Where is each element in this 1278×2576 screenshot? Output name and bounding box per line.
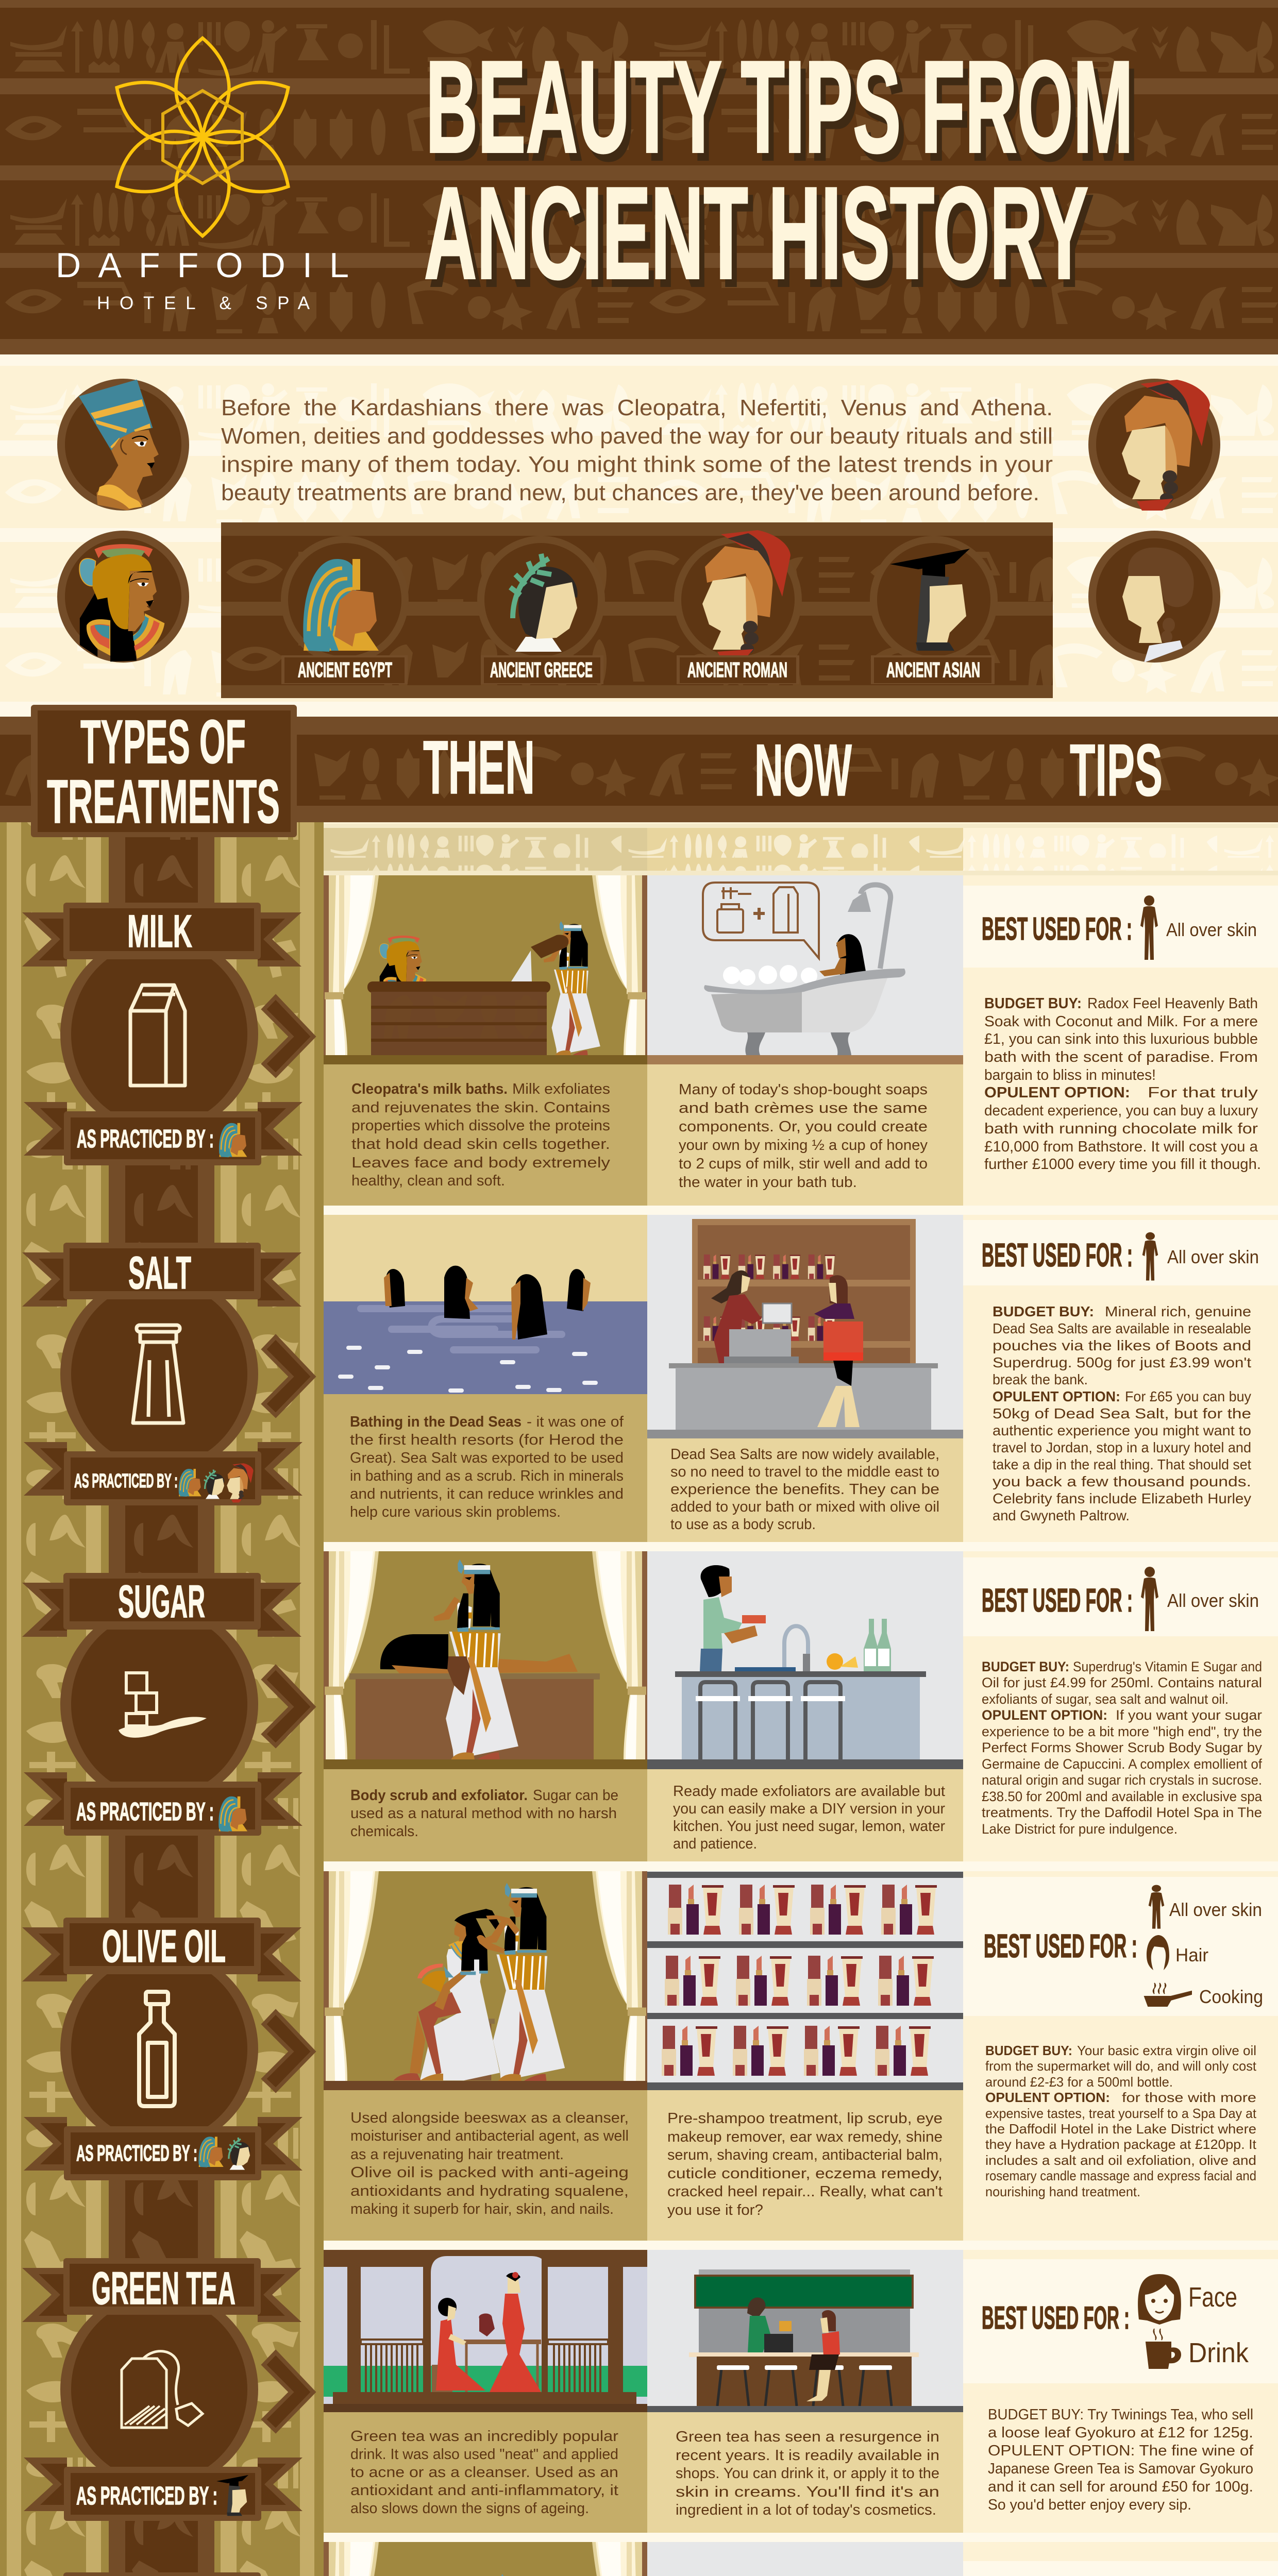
- best used for: BEST USED FOR :: [982, 1582, 1133, 1619]
- text: tea now: Green tea has seen a resurgence in: [676, 2429, 939, 2445]
- text: tea now: recent years. It is readily available in: [676, 2447, 939, 2464]
- tips text: Celebrity fans include Elizabeth Hurley: [993, 1490, 1251, 1506]
- best used for: BEST USED FOR :: [982, 2300, 1130, 2336]
- tips text: [985, 2043, 1257, 2199]
- text: milk now: Many of today's shop-bought soaps: [679, 1081, 928, 1098]
- text: sugar then: used as a natural method with no harsh: [350, 1805, 617, 1822]
- treatment: green tea: [22, 2258, 313, 2521]
- text: tea then: also slows down the signs of ageing.: [350, 2500, 589, 2517]
- tips text: the Daffodil Hotel in the Lake District where: [985, 2121, 1256, 2137]
- tips text: experience to be a bit more "high end", try the: [982, 1724, 1262, 1739]
- heading: now: NOW: [754, 730, 852, 811]
- text: sugar then: chemicals.: [350, 1823, 418, 1840]
- best used for: Cooking: [1199, 1986, 1263, 2007]
- scene: cleopatra milk bath: [324, 875, 647, 1064]
- row: sugar then: [324, 1551, 647, 1840]
- icon: sugar spoon: [119, 1673, 207, 1738]
- tips text: Oil for just £4.99 for 250ml. Contains natural: [982, 1675, 1262, 1690]
- header panel: [0, 0, 1278, 354]
- tips text: For £65 you can buy: [1125, 1388, 1251, 1404]
- text: milk then: Leaves face and body extremely: [351, 1155, 611, 1171]
- text: olive now: cracked heel repair... Really, what can't: [667, 2183, 943, 2200]
- tips text: Japanese Green Tea is Samovar Gyokuro: [988, 2461, 1253, 2477]
- tips text: BUDGET BUY:: [982, 1659, 1069, 1674]
- text: tea now: skin in creams. You'll find it's an: [676, 2484, 939, 2500]
- row: milk then: [324, 875, 647, 1189]
- text: milk then: [351, 1081, 611, 1189]
- tips text: OPULENT OPTION: The fine wine of: [988, 2443, 1254, 2459]
- heading: then: THEN: [423, 725, 535, 810]
- best used for: [963, 1220, 1278, 1285]
- speech bubble: [703, 883, 819, 958]
- text: tea then: [350, 2428, 618, 2517]
- column panels backgrounds: [324, 824, 1278, 2576]
- scene: salt shop: [647, 1215, 963, 1438]
- scene: applying kohl: [324, 2542, 647, 2576]
- text: olive then: [350, 2110, 629, 2217]
- row: salt tips: [963, 1220, 1278, 1523]
- icon: milk carton: [130, 985, 185, 1086]
- text: olive then: Used alongside beeswax as a cleanser,: [350, 2110, 629, 2126]
- treatment: salt: [22, 1243, 313, 1505]
- tips text: Germaine de Capuccini. A complex emollient of: [982, 1756, 1262, 1772]
- text: milk then: Milk exfoliates: [512, 1081, 610, 1097]
- scene: kitchen: [647, 1551, 963, 1769]
- text: milk then: properties which dissolve the proteins: [351, 1117, 610, 1134]
- row: kohl tips: [963, 2561, 1278, 2576]
- text: milk now: to 2 cups of milk, stir well and add to: [679, 1156, 928, 1172]
- tips text: For that truly: [1148, 1084, 1258, 1101]
- tips text: BUDGET BUY:: [985, 2043, 1072, 2058]
- row: sugar tips: [963, 1557, 1278, 1837]
- treatment: kohl: [22, 2572, 313, 2576]
- text: sugar then: Body scrub and exfoliator.: [350, 1787, 528, 1804]
- tips text: rosemary candle massage and express facial and: [985, 2168, 1256, 2183]
- treatment: green tea: AS PRACTICED BY :: [76, 2482, 217, 2510]
- scene: product shelves: [647, 1871, 963, 2090]
- intro text: Women, deities and goddesses who paved the way for our beauty rituals and still: [221, 423, 1053, 449]
- treatment: olive oil: AS PRACTICED BY :: [76, 2141, 197, 2166]
- tips text: Radox Feel Heavenly Bath: [1087, 995, 1258, 1012]
- culture: ancient Greece: [477, 536, 605, 684]
- row: olive tips: [963, 1877, 1278, 2199]
- row: tea then: [324, 2250, 647, 2517]
- logo: Daffodil Hotel and Spa: HOTEL & SPA: [97, 293, 310, 313]
- treatment: olive oil: [22, 1918, 313, 2180]
- row: sugar now: [647, 1551, 963, 1852]
- scene: bath tub: [647, 875, 963, 1064]
- treatment: green tea: GREEN TEA: [92, 2262, 236, 2314]
- tips text: further £1000 every time you fill it though.: [984, 1156, 1261, 1173]
- text: sugar now: and patience.: [673, 1836, 757, 1852]
- tips text: take a dip in the real thing. That should set: [993, 1456, 1251, 1472]
- best used for: Hair: [1175, 1944, 1208, 1965]
- tips text: Mineral rich, genuine: [1105, 1303, 1251, 1319]
- scene: tea bar: [647, 2250, 963, 2406]
- tips text: break the bank.: [993, 1371, 1088, 1387]
- text: olive then: antioxidants and hydrating squalene,: [350, 2183, 629, 2199]
- culture: ancient Greece: ANCIENT GREECE: [490, 658, 593, 682]
- tips text: authentic experience you might want to: [993, 1422, 1251, 1438]
- tips text: BUDGET BUY:: [993, 1303, 1094, 1319]
- text: olive now: [667, 2110, 943, 2218]
- text: sugar then: [350, 1787, 618, 1840]
- intro text: beauty treatments are brand new, but chances are, they've been around before.: [221, 480, 1039, 505]
- text: salt now: experience the benefits. They can be: [670, 1481, 939, 1498]
- row: milk tips: [963, 886, 1278, 1173]
- tips text: bargain to bliss in minutes!: [984, 1067, 1156, 1083]
- heading: types of treatments: TYPES OF: [80, 707, 246, 776]
- best used for: All over skin: [1169, 1899, 1262, 1920]
- culture: ancient Rome: [674, 530, 802, 684]
- text: sugar now: you can easily make a DIY version in your: [673, 1801, 945, 1817]
- best used for: [963, 2561, 1278, 2576]
- tips text: pouches via the likes of Boots and: [993, 1337, 1251, 1353]
- best used for: [963, 2259, 1278, 2383]
- text: salt now: to use as a body scrub.: [670, 1516, 816, 1533]
- text: olive now: you use it for?: [667, 2202, 763, 2218]
- row: salt now: [647, 1215, 963, 1533]
- tips text: [993, 1303, 1251, 1523]
- treatment: olive oil: OLIVE OIL: [102, 1920, 226, 1972]
- treatment: milk: MILK: [127, 905, 192, 957]
- best used for: Face: [1188, 2282, 1237, 2313]
- row: kohl now: [647, 2542, 963, 2576]
- row: tea tips: [963, 2259, 1278, 2513]
- text: olive then: Olive oil is packed with anti-ageing: [350, 2164, 629, 2181]
- best used for: [963, 886, 1278, 968]
- tips text: natural origin and sugar rich crystals in sucrose.: [982, 1772, 1262, 1788]
- intro panel: [0, 354, 1278, 717]
- tips text: OPULENT OPTION:: [985, 2090, 1110, 2105]
- column heading band: [0, 705, 1278, 837]
- row: milk now: [647, 875, 963, 1191]
- scene: tea pavilion: [324, 2250, 647, 2404]
- text: salt then: and nutrients, it can reduce wrinkles and: [350, 1486, 624, 1502]
- icon: tea cup: [1146, 2329, 1181, 2368]
- scene: body scrub: [324, 1551, 647, 1769]
- text: salt then: help cure various skin problems.: [350, 1504, 561, 1520]
- tips text: So you'd better enjoy every sip.: [988, 2497, 1191, 2513]
- portrait: Nefertiti: [57, 379, 189, 511]
- best used for: All over skin: [1166, 919, 1257, 940]
- intro text: [221, 395, 1053, 505]
- text: salt then: Great). Sea Salt was exported to be used: [350, 1450, 624, 1466]
- treatment: sugar: AS PRACTICED BY :: [76, 1798, 214, 1826]
- culture: ancient Egypt: ANCIENT EGYPT: [298, 658, 392, 682]
- text: sugar now: kitchen. You just need sugar, lemon, water: [673, 1818, 945, 1835]
- best used for: BEST USED FOR :: [984, 1927, 1137, 1964]
- portrait: Venus: [1088, 531, 1220, 663]
- culture: ancient Egypt: [281, 536, 409, 684]
- heading: tips: TIPS: [1070, 730, 1163, 811]
- icon: cooking pan: [1145, 1983, 1191, 2006]
- panel: ancient cultures: [221, 522, 1053, 698]
- text: tea now: [676, 2429, 939, 2518]
- tips text: expensive tastes, treat yourself to a Spa Day at: [985, 2106, 1257, 2121]
- tips text: [988, 2406, 1254, 2513]
- text: sugar now: [673, 1783, 945, 1852]
- text: olive then: making it superb for hair, skin, and nails.: [350, 2201, 614, 2217]
- tips text: £38.50 for 200ml and available in exclusive spa: [982, 1789, 1263, 1804]
- text: milk now: [679, 1081, 928, 1191]
- row: kohl then: [324, 2542, 647, 2576]
- treatment: salt: AS PRACTICED BY :: [74, 1470, 178, 1492]
- tips text: OPULENT OPTION:: [982, 1707, 1107, 1723]
- text: salt now: Dead Sea Salts are now widely available,: [670, 1446, 939, 1463]
- text: milk now: and bath crèmes use the same: [679, 1100, 928, 1116]
- tips text: and Gwyneth Paltrow.: [993, 1507, 1130, 1523]
- text: salt now: [670, 1446, 939, 1533]
- text: salt now: so no need to travel to the middle east to: [670, 1464, 939, 1480]
- tips text: Superdrug's Vitamin E Sugar and: [1073, 1659, 1262, 1674]
- tips text: OPULENT OPTION:: [984, 1084, 1130, 1101]
- tips text: If you want your sugar: [1116, 1707, 1262, 1723]
- row: olive now: [647, 1871, 963, 2218]
- tips text: bath with running chocolate milk for: [984, 1121, 1258, 1137]
- portrait: Cleopatra: [57, 531, 189, 663]
- tips text: BUDGET BUY:: [984, 995, 1082, 1012]
- text: milk now: your own by mixing ½ a cup of honey: [679, 1137, 928, 1154]
- text: tea then: drink. It was also used "neat" and applied: [350, 2446, 618, 2463]
- logo: Daffodil Hotel and Spa: DAFFODIL: [56, 246, 349, 285]
- text: salt then: in bathing and as a scrub. Rich in minerals: [350, 1468, 624, 1484]
- intro text: inspire many of them today. You might think some of the latest trends in your: [221, 452, 1053, 477]
- scene: hair treatment: [324, 1871, 647, 2090]
- text: salt then: [350, 1414, 624, 1520]
- tips text: includes a salt and oil exfoliation, olive and: [985, 2153, 1256, 2168]
- left column background: [0, 822, 324, 2576]
- best used for: [963, 1557, 1278, 1636]
- tips text: Perfect Forms Shower Scrub Body Sugar by: [982, 1740, 1262, 1755]
- text: milk then: healthy, clean and soft.: [351, 1173, 505, 1189]
- tips text: [984, 995, 1261, 1173]
- title: [424, 33, 1138, 314]
- culture: ancient Asia: [870, 536, 998, 684]
- logo: Daffodil Hotel and Spa: [56, 38, 349, 313]
- text: tea now: shops. You can drink it, or apply it to the: [676, 2465, 939, 2482]
- intro text: Before the Kardashians there was Cleopatra, Nefertiti, Venus and Athena.: [221, 395, 1053, 420]
- tips text: Lake District for pure indulgence.: [982, 1821, 1178, 1837]
- text: tea now: ingredient in a lot of today's cosmetics.: [676, 2502, 936, 2518]
- tips text: BUDGET BUY: Try Twinings Tea, who sell: [988, 2406, 1253, 2423]
- tips text: from the supermarket will do, and will only cost: [985, 2058, 1257, 2074]
- tips text: around £2-£3 for a 500ml bottle.: [985, 2074, 1173, 2090]
- portrait: Athena: [1088, 379, 1220, 511]
- text: tea then: Green tea was an incredibly popular: [350, 2428, 618, 2445]
- text: olive now: cuticle conditioner, eczema remedy,: [667, 2165, 943, 2182]
- tips text: for those with more: [1122, 2090, 1256, 2105]
- icon: hair: [1147, 1935, 1169, 1970]
- tips text: Soak with Coconut and Milk. For a mere: [984, 1013, 1258, 1030]
- scene: dressing table: [647, 2542, 963, 2576]
- row: olive then: [324, 1871, 647, 2217]
- treatment: sugar: SUGAR: [118, 1575, 205, 1627]
- text: milk then: that hold dead skin cells together.: [351, 1136, 610, 1153]
- treatment: salt: SALT: [128, 1247, 191, 1298]
- icon: oil bottle: [139, 1992, 175, 2106]
- tips text: £1, you can sink into this luxurious bubble: [984, 1031, 1258, 1047]
- text: olive now: Pre-shampoo treatment, lip scrub, eye: [667, 2110, 943, 2127]
- text: olive now: makeup remover, ear wax remedy, shine: [667, 2129, 943, 2145]
- best used for: [963, 1877, 1278, 2016]
- text: olive now: serum, shaving cream, antibacterial balm,: [667, 2147, 943, 2163]
- text: sugar then: Sugar can be: [533, 1787, 618, 1804]
- heading: types of treatments: [31, 705, 297, 837]
- text: milk now: components. Or, you could create: [679, 1118, 928, 1135]
- heading: types of treatments: TREATMENTS: [47, 767, 280, 836]
- treatment: milk: [22, 903, 313, 1165]
- culture: ancient Asia: ANCIENT ASIAN: [886, 658, 980, 682]
- text: milk then: Cleopatra's milk baths.: [351, 1081, 508, 1097]
- text: salt then: - it was one of: [527, 1414, 624, 1430]
- icon: tea bag: [122, 2351, 203, 2428]
- icon: salt shaker: [133, 1325, 183, 1423]
- tips text: Dead Sea Salts are available in resealable: [993, 1320, 1251, 1336]
- text: milk then: and rejuvenates the skin. Contains: [351, 1099, 610, 1116]
- best used for: All over skin: [1167, 1590, 1259, 1611]
- best used for: All over skin: [1167, 1246, 1259, 1267]
- text: salt now: added to your bath or mixed with olive oil: [670, 1499, 939, 1515]
- best used for: Drink: [1188, 2337, 1249, 2368]
- row: salt then: [324, 1215, 647, 1520]
- tips text: they have a Hydration package at £120pp. It: [985, 2137, 1257, 2152]
- text: sugar now: Ready made exfoliators are available but: [673, 1783, 945, 1800]
- tips text: bath with the scent of paradise. From: [984, 1049, 1258, 1065]
- tips text: a loose leaf Gyokuro at £12 for 125g.: [988, 2425, 1253, 2441]
- text: milk now: the water in your bath tub.: [679, 1174, 857, 1191]
- tips text: travel to Jordan, stop in a luxury hotel and: [993, 1439, 1251, 1455]
- text: tea then: to acne or as a cleanser. Used as an: [350, 2464, 618, 2481]
- tips text: OPULENT OPTION:: [993, 1388, 1120, 1404]
- treatment: sugar: [22, 1573, 313, 1836]
- row: tea now: [647, 2250, 963, 2518]
- treatment: milk: AS PRACTICED BY :: [77, 1125, 214, 1153]
- tips text: 50kg of Dead Sea Salt, but for the: [993, 1405, 1251, 1421]
- culture: ancient Rome: ANCIENT ROMAN: [687, 658, 787, 682]
- tips text: exfoliants of sugar, sea salt and walnut oil.: [982, 1691, 1229, 1707]
- tips text: Superdrug. 500g for just £3.99 won't: [993, 1354, 1251, 1370]
- tips text: [982, 1659, 1263, 1837]
- scene: bathing in the dead sea: [324, 1215, 647, 1394]
- text: salt then: Bathing in the Dead Seas: [350, 1414, 522, 1430]
- best used for: BEST USED FOR :: [982, 911, 1132, 947]
- tips text: £10,000 from Bathstore. It will cost you a: [984, 1139, 1258, 1155]
- text: tea then: antioxidant and anti-inflammatory, it: [350, 2482, 618, 2499]
- best used for: BEST USED FOR :: [982, 1236, 1133, 1274]
- text: olive then: moisturiser and antibacterial agent, as well: [350, 2128, 629, 2144]
- tips text: decadent experience, you can buy a luxury: [984, 1103, 1258, 1119]
- text: olive then: as a rejuvenating hair treatment.: [350, 2146, 564, 2163]
- tips text: Your basic extra virgin olive oil: [1077, 2043, 1256, 2058]
- tips text: treatments. Try the Daffodil Hotel Spa in The: [982, 1805, 1262, 1820]
- tips text: and it can sell for around £50 for 100g.: [988, 2479, 1253, 2495]
- text: salt then: the first health resorts (for Herod the: [350, 1432, 624, 1448]
- tips text: nourishing hand treatment.: [985, 2184, 1140, 2199]
- tips text: you back a few thousand pounds.: [993, 1473, 1251, 1489]
